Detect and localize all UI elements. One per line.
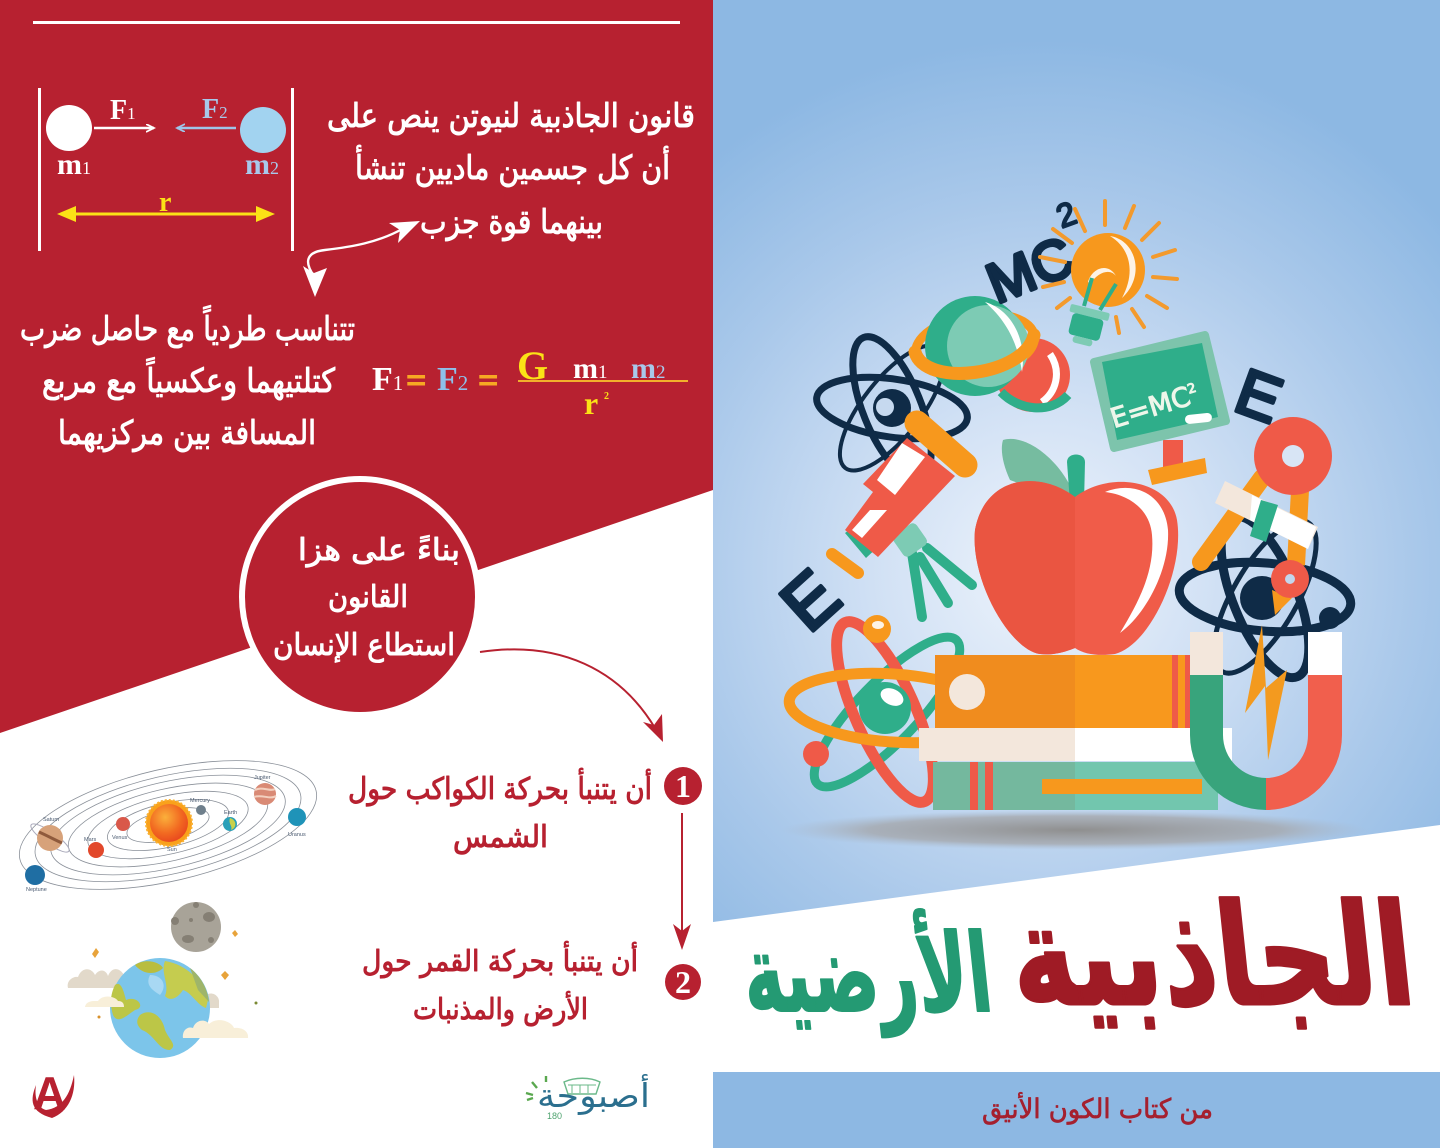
- logo: publisher mark: A: [33, 1067, 66, 1119]
- icon: red planet: [996, 338, 1070, 412]
- icon: light bulb: [1040, 201, 1177, 349]
- text block: law statement: قانون الجاذبية لنيوتن ينص على: [327, 96, 695, 136]
- text block: proportionality: [20, 305, 355, 452]
- formula: r: [584, 385, 598, 421]
- formula: =: [406, 360, 427, 400]
- moon and earth illustration: [68, 902, 258, 1058]
- logo: morning show: 180: [547, 1111, 562, 1121]
- formula: m1: [573, 352, 608, 385]
- logo: morning show: [526, 1074, 650, 1121]
- callout circle: القانون: [328, 580, 408, 615]
- solar system illustration: Earth: [224, 810, 237, 816]
- icon: navy atom right: [1176, 505, 1354, 689]
- list item 2: 2: [675, 964, 691, 1000]
- icon: chalkboard: 2: [1186, 381, 1198, 398]
- list item 2: أن يتنبأ بحركة القمر حول: [362, 940, 638, 978]
- text block: law statement: بينهما قوة جزب: [420, 202, 603, 241]
- label: MC squared: 2: [1051, 194, 1081, 235]
- solar system illustration: Jupiter: [254, 775, 271, 781]
- panel: left red background: [0, 0, 713, 733]
- solar system illustration: Venus: [112, 835, 128, 841]
- vertical arrow between list items: [673, 813, 691, 950]
- white title band: [713, 825, 1440, 1072]
- text block: proportionality: تتناسب طردياً مع حاصل ضرب: [20, 305, 355, 348]
- icon: books: [919, 655, 1232, 810]
- label: MC squared: MC: [978, 224, 1082, 315]
- list item 2: [362, 940, 701, 1026]
- formula: G: [517, 343, 548, 388]
- force diagram: m2: [245, 148, 279, 181]
- list item 2: الأرض والمذنبات: [413, 990, 588, 1026]
- curved arrow to list: [480, 649, 663, 742]
- icon: lower-left atom: [787, 610, 999, 814]
- logo: morning show: أصبوحة: [537, 1074, 650, 1115]
- solar system illustration: Mars: [84, 837, 96, 843]
- force diagram: F1: [110, 95, 136, 126]
- formula: m2: [631, 352, 666, 385]
- formula: F1: [372, 361, 403, 398]
- title: الأرضية: [736, 909, 998, 1037]
- subtitle: من كتاب الكون الأنيق: [982, 1091, 1213, 1125]
- text block: law statement: [327, 96, 695, 241]
- label: E left: E: [766, 555, 855, 647]
- icon: telescope: [832, 423, 972, 617]
- text block: proportionality: كتلتيهما وعكسياً مع مربع: [42, 357, 335, 400]
- solar system illustration: Saturn: [43, 817, 59, 823]
- formula: F2: [437, 361, 468, 398]
- label: E right: E: [1227, 355, 1291, 437]
- solar system illustration: Sun: [167, 847, 177, 853]
- force diagram: [38, 88, 294, 251]
- solar system illustration: Mercury: [190, 798, 210, 804]
- force diagram: m1: [57, 148, 91, 181]
- panel: right blue background: [713, 0, 1440, 1148]
- double arrow linking statement and proportionality: [303, 221, 420, 297]
- text block: law statement: أن كل جسمين ماديين تنشأ: [355, 145, 670, 187]
- icon: ringed green planet: [911, 296, 1039, 396]
- icon: compass: [1201, 417, 1332, 615]
- icon: chalkboard: E=MC: [1107, 381, 1194, 435]
- list item 1: [348, 767, 702, 855]
- icon: navy atom left: [813, 327, 971, 489]
- callout circle: بناءً على هزا: [298, 533, 460, 568]
- title: [736, 875, 1422, 1038]
- list item 1: أن يتنبأ بحركة الكواكب حول: [348, 767, 652, 807]
- bottom blue band: [713, 1072, 1440, 1148]
- formula: [372, 343, 688, 421]
- force diagram: r: [159, 187, 171, 218]
- text block: proportionality: المسافة بين مركزيهما: [58, 413, 316, 452]
- callout circle: استطاع الإنسان: [273, 628, 455, 663]
- solar system illustration: [7, 736, 329, 914]
- top white rule: [33, 21, 680, 24]
- icon: apple: [975, 439, 1178, 655]
- icon: chalkboard: [1094, 335, 1226, 485]
- force diagram: F2: [202, 94, 228, 125]
- callout circle: [242, 479, 478, 715]
- formula: 2: [604, 391, 609, 402]
- formula: =: [478, 360, 499, 400]
- list item 1: 1: [675, 768, 691, 804]
- shadow under books: [780, 810, 1370, 850]
- solar system illustration: Neptune: [26, 887, 47, 893]
- icon: magnet: [1190, 625, 1342, 810]
- list item 1: الشمس: [453, 820, 548, 855]
- solar system illustration: Uranus: [288, 832, 306, 838]
